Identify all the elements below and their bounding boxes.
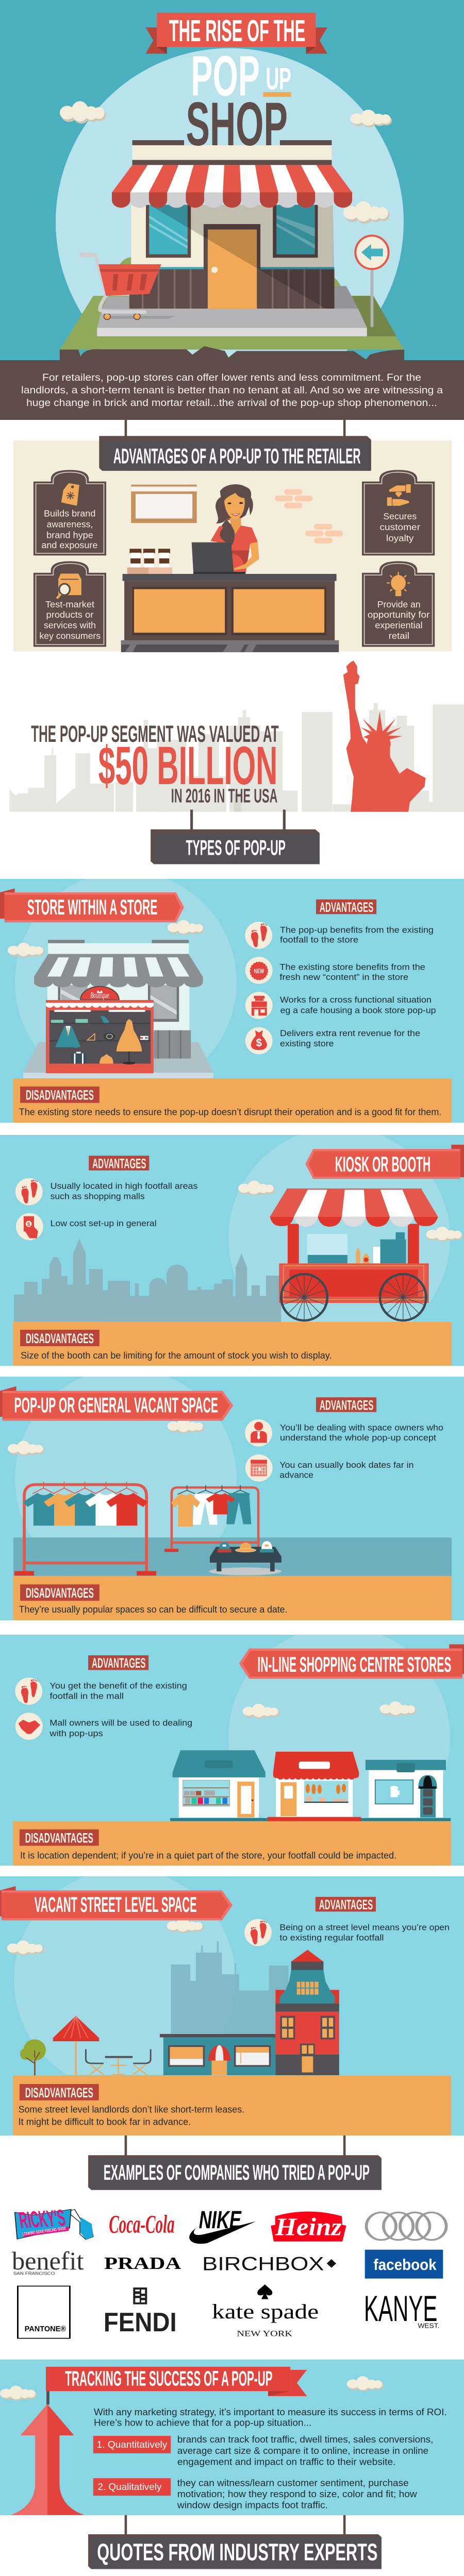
company logos: Coca-Cola xyxy=(109,2210,175,2239)
advantage: book dates: You can usually book dates far in xyxy=(279,1460,413,1470)
logo: nike xyxy=(189,2206,256,2244)
logo: pantone: PANTONE® xyxy=(25,2325,66,2333)
island xyxy=(60,296,404,362)
wheels xyxy=(281,1274,426,1320)
tree xyxy=(20,2039,46,2076)
heading: shop: SHOP xyxy=(186,89,288,158)
badge: test market: products or xyxy=(46,609,93,620)
icon: rising arrow xyxy=(10,2404,85,2515)
red corner building xyxy=(275,1950,339,2075)
advantages tag xyxy=(316,899,376,915)
background buildings xyxy=(171,1941,289,2033)
background circle xyxy=(228,1135,450,1322)
icon: price tag xyxy=(61,483,79,506)
badge: experiential retail: experiential xyxy=(375,620,423,630)
title: THE RISE OF THE xyxy=(169,13,305,48)
heading: pop: POP xyxy=(191,44,260,108)
badge: loyalty xyxy=(362,470,435,555)
advantage: mall owners: with pop-ups xyxy=(49,1728,103,1738)
sign posts xyxy=(190,809,286,830)
teal shop xyxy=(160,2034,275,2075)
advantages tag xyxy=(88,1655,148,1671)
sign posts xyxy=(125,420,345,439)
title ribbon tails xyxy=(145,27,327,54)
background circle xyxy=(15,879,237,1058)
wall window xyxy=(131,485,197,523)
logo: audi xyxy=(367,2212,446,2240)
heading sign: types of pop-up: TYPES OF POP-UP xyxy=(186,836,286,860)
ribbon tail xyxy=(268,2370,307,2396)
badge: experiential retail: opportunity for xyxy=(368,609,429,620)
advantage: footfall: The pop-up benefits from the existing xyxy=(280,925,434,935)
shopping cart xyxy=(80,252,175,319)
logo: fendi xyxy=(104,2287,177,2337)
icon: hands and heart xyxy=(387,484,411,506)
heading: up: UP xyxy=(266,62,291,96)
flag pole xyxy=(46,2391,49,2404)
clouds xyxy=(0,2376,384,2401)
icon: box and magnifier xyxy=(57,573,81,599)
row of mall shops xyxy=(170,1750,451,1822)
advantages tag xyxy=(316,1897,376,1912)
badge: loyalty: customer xyxy=(379,522,420,532)
intro text: huge change in brick and mortar retail...the arrival of the pop-up shop phenomenon... xyxy=(26,397,437,409)
logo: ricky's xyxy=(15,2205,93,2240)
disadvantages band xyxy=(13,1322,452,1366)
disadvantages band: Some street level landlords don’t like short-term leases. xyxy=(19,2104,244,2114)
text: qualitatively: motivation; how they respond to size, color and fit; how xyxy=(177,2489,418,2499)
logo: kate spade xyxy=(212,2284,319,2338)
clouds xyxy=(7,1918,204,1955)
text: qualitatively: window design impacts foot traffic. xyxy=(177,2500,328,2511)
shop building xyxy=(129,140,335,309)
badge: test market: key consumers xyxy=(39,631,101,641)
advantage: mall owners: Mall owners will be used to dealing xyxy=(49,1718,192,1727)
advantage: cross functional: eg a cafe housing a book store pop-up xyxy=(280,1005,436,1015)
tag: qualitatively: 2. Qualitatively xyxy=(97,2482,162,2493)
advantage: high footfall: Usually located in high footfall areas xyxy=(51,1181,198,1191)
counter xyxy=(121,574,339,652)
clouds xyxy=(60,101,392,224)
boutique pop-up stall: Boutique xyxy=(90,991,109,1000)
badge: test market xyxy=(34,561,106,647)
heading sign xyxy=(99,436,371,471)
badge: brand awareness: Builds brand xyxy=(44,509,95,519)
advantage: new content: The existing store benefits from the xyxy=(279,962,425,972)
background circle xyxy=(15,1377,237,1537)
bushes xyxy=(120,257,344,299)
panel: hero illustration xyxy=(60,101,404,362)
logo: benefit: benefit xyxy=(12,2247,84,2275)
wall bricks xyxy=(275,489,343,544)
advantage: rent revenue: existing store xyxy=(280,1038,334,1048)
badge: experiential retail xyxy=(362,561,435,647)
panel: vacant street level space xyxy=(0,1876,464,2136)
advantages tag xyxy=(316,1397,376,1413)
panel: store within a store xyxy=(0,879,464,1123)
tag: quantitatively: 1. Quantitatively xyxy=(97,2439,168,2450)
intro text xyxy=(21,372,443,409)
hero sky circle xyxy=(56,48,404,396)
disadvantages band: They’re usually popular spaces so can be difficult to secure a date. xyxy=(19,1604,287,1615)
advantage: regular footfall xyxy=(244,1919,450,1946)
advantage: rent revenue: $ xyxy=(256,1037,262,1049)
advantage: regular footfall: to existing regular footfall xyxy=(279,1933,384,1942)
badge: experiential retail: Provide an xyxy=(377,600,421,609)
statistic value: $50 BILLION xyxy=(98,735,277,796)
badge: brand awareness xyxy=(34,470,106,555)
panel: in-line shopping centre stores xyxy=(0,1635,464,1866)
advantage: space owners xyxy=(245,1419,443,1447)
logo: pantone xyxy=(18,2286,70,2338)
clouds xyxy=(8,920,204,958)
logo: heinz xyxy=(271,2211,346,2242)
coffee cups xyxy=(127,549,172,574)
boutique pop-up stall xyxy=(46,987,154,1073)
advantage: space owners: You’ll be dealing with space owners who xyxy=(280,1422,443,1432)
intro paragraph: Here’s how to achieve that for a pop-up situation... xyxy=(94,2418,311,2428)
ribbon: kiosk or booth xyxy=(305,1145,464,1179)
badge: brand awareness: and exposure xyxy=(41,540,97,550)
logo: kanye west: WEST. xyxy=(418,2322,439,2329)
advantage: low cost: $ xyxy=(27,1222,30,1227)
heading sign: quotes xyxy=(88,2534,382,2569)
intro text: For retailers, pop-up stores can offer lower rents and less commitment. For the xyxy=(42,372,421,383)
ribbon: store within a store xyxy=(0,888,184,922)
panel: intro text bar xyxy=(0,360,464,420)
panel: statistic with skyline xyxy=(9,660,464,864)
advantage: book dates xyxy=(245,1454,413,1482)
badge: loyalty: loyalty xyxy=(386,533,413,543)
disadvantages band xyxy=(13,2076,451,2136)
advantage: high footfall: such as shopping malls xyxy=(51,1191,145,1201)
advantage: regular footfall: Being on a street level means you’re open xyxy=(279,1922,450,1933)
heading sign: types of pop-up xyxy=(151,829,320,864)
text: quantitatively xyxy=(177,2434,433,2467)
badge: experiential retail: retail xyxy=(389,631,409,641)
ribbon: street level: VACANT STREET LEVEL SPACE xyxy=(35,1893,197,1917)
intro text: landlords, a short-term tenant is better than no tenant at all. And so we are witnessing a xyxy=(21,384,443,396)
title ribbon xyxy=(157,13,316,47)
text: quantitatively: engagement and impact on traffic to their website. xyxy=(177,2457,395,2467)
background circle xyxy=(14,1876,235,2075)
logo: nike: NIKE xyxy=(199,2206,242,2234)
advantage: space owners: understand the whole pop-up concept xyxy=(280,1432,436,1443)
tag: quantitatively xyxy=(93,2436,171,2453)
sign posts xyxy=(125,2515,345,2535)
logo: ricky's: LOOKING GOOD FEELING GOOD xyxy=(22,2227,67,2236)
disadvantages band xyxy=(13,1078,452,1123)
disadvantages band xyxy=(13,1576,452,1620)
small clothes rack xyxy=(164,1485,258,1552)
advantage: rent revenue: Delivers extra rent revenue for the xyxy=(280,1028,420,1038)
advantage: existing footfall: You get the benefit of the existing xyxy=(49,1681,187,1691)
badge: test market: Test-market xyxy=(45,600,94,609)
icon: light bulb xyxy=(387,572,410,596)
advantage: low cost: Low cost set-up in general xyxy=(51,1218,157,1228)
heading sign: examples of companies xyxy=(88,2155,382,2190)
statistic footnote: IN 2016 IN THE USA xyxy=(171,785,277,807)
advantage: low cost xyxy=(16,1213,157,1240)
disadvantages band: It might be difficult to book far in advance. xyxy=(19,2116,191,2127)
clouds xyxy=(243,1701,417,1719)
advantage: cross functional xyxy=(245,992,436,1019)
background circle xyxy=(228,1635,450,1818)
panel: advantages to the retailer xyxy=(13,420,452,651)
logo: benefit xyxy=(12,2247,84,2276)
ribbon: vacant space: POP-UP OR GENERAL VACANT SPACE xyxy=(14,1393,218,1417)
skyline xyxy=(9,703,464,812)
advantage: book dates: advance xyxy=(279,1470,313,1480)
panel: pop-up or general vacant space xyxy=(0,1377,464,1620)
food cart xyxy=(270,1189,438,1320)
text: qualitatively: they can witness/learn customer sentiment, purchase xyxy=(177,2478,409,2488)
ribbon xyxy=(46,2367,290,2391)
logo: facebook xyxy=(365,2250,443,2279)
cream panel xyxy=(13,440,452,651)
badge: test market: services with xyxy=(44,620,96,630)
advantage: new content: NEW xyxy=(254,968,264,975)
hat table xyxy=(209,1541,281,1575)
disadvantages band xyxy=(13,1821,451,1866)
statue of liberty xyxy=(343,660,425,812)
advantage: new content xyxy=(245,957,425,984)
text: qualitatively xyxy=(177,2478,418,2511)
logo: birchbox: BIRCHBOX xyxy=(202,2253,324,2274)
floor xyxy=(13,1537,452,1576)
logo: kate spade: kate spade xyxy=(212,2300,319,2323)
title xyxy=(145,13,327,158)
advantages tag xyxy=(89,1156,149,1171)
clouds xyxy=(8,1418,204,1456)
company logos: RICKY'S xyxy=(17,2205,67,2233)
ribbon: store within a store: STORE WITHIN A STORE xyxy=(27,895,157,920)
logo: benefit: SAN FRANCISCO xyxy=(13,2272,55,2276)
ribbon: in-line stores xyxy=(239,1645,464,1679)
sign posts xyxy=(125,2136,345,2156)
road sign with arrow xyxy=(355,235,389,327)
clouds xyxy=(238,1181,463,1242)
panel: kiosk or booth xyxy=(0,1135,464,1366)
ribbon: street level xyxy=(0,1886,233,1920)
large clothes rack xyxy=(14,1482,156,1575)
panel: hero background xyxy=(0,0,464,360)
disadvantages band: It is location dependent; if you’re in a quiet part of the store, your footfall could be impacted. xyxy=(20,1850,396,1860)
pavement xyxy=(97,286,367,336)
advantage: mall owners xyxy=(15,1713,192,1740)
logo: fendi: FENDI xyxy=(104,2307,177,2337)
logo: prada: PRADA xyxy=(104,2254,181,2273)
advantage: high footfall xyxy=(15,1178,198,1205)
advantage: new content: fresh new “content” in the store xyxy=(279,972,408,982)
grey store xyxy=(34,940,203,1059)
awning xyxy=(112,165,352,208)
logo: heinz: Heinz xyxy=(275,2213,342,2241)
underline xyxy=(263,92,291,97)
advantage: cross functional: Works for a cross functional situation xyxy=(280,994,432,1005)
badge: brand awareness: awareness, xyxy=(47,519,93,529)
advantage: rent revenue xyxy=(245,1027,420,1054)
disadvantages band: The existing store needs to ensure the pop-up doesn’t disrupt their operation and is a good fit for them. xyxy=(19,1107,441,1117)
advantage: existing footfall xyxy=(15,1677,187,1705)
pavement xyxy=(23,1042,213,1078)
advantage: existing footfall: footfall in the mall xyxy=(49,1691,124,1701)
logo: kate spade: NEW YORK xyxy=(237,2329,293,2338)
panel: tracking the success xyxy=(0,2360,464,2515)
intro paragraph xyxy=(94,2407,447,2428)
company logos xyxy=(12,2205,446,2338)
badge: brand awareness: brand hype xyxy=(46,530,93,540)
patio umbrella and table xyxy=(53,2016,151,2075)
advantage: footfall: footfall to the store xyxy=(280,935,358,945)
tag: qualitatively xyxy=(93,2478,171,2496)
advantage: footfall xyxy=(245,922,434,949)
badge: loyalty: Secures xyxy=(383,511,417,521)
skyline xyxy=(14,1239,281,1322)
ribbon: vacant space xyxy=(0,1386,233,1421)
disadvantages band: Size of the booth can be limiting for the amount of stock you wish to display. xyxy=(21,1350,332,1361)
woman at counter xyxy=(192,484,259,574)
